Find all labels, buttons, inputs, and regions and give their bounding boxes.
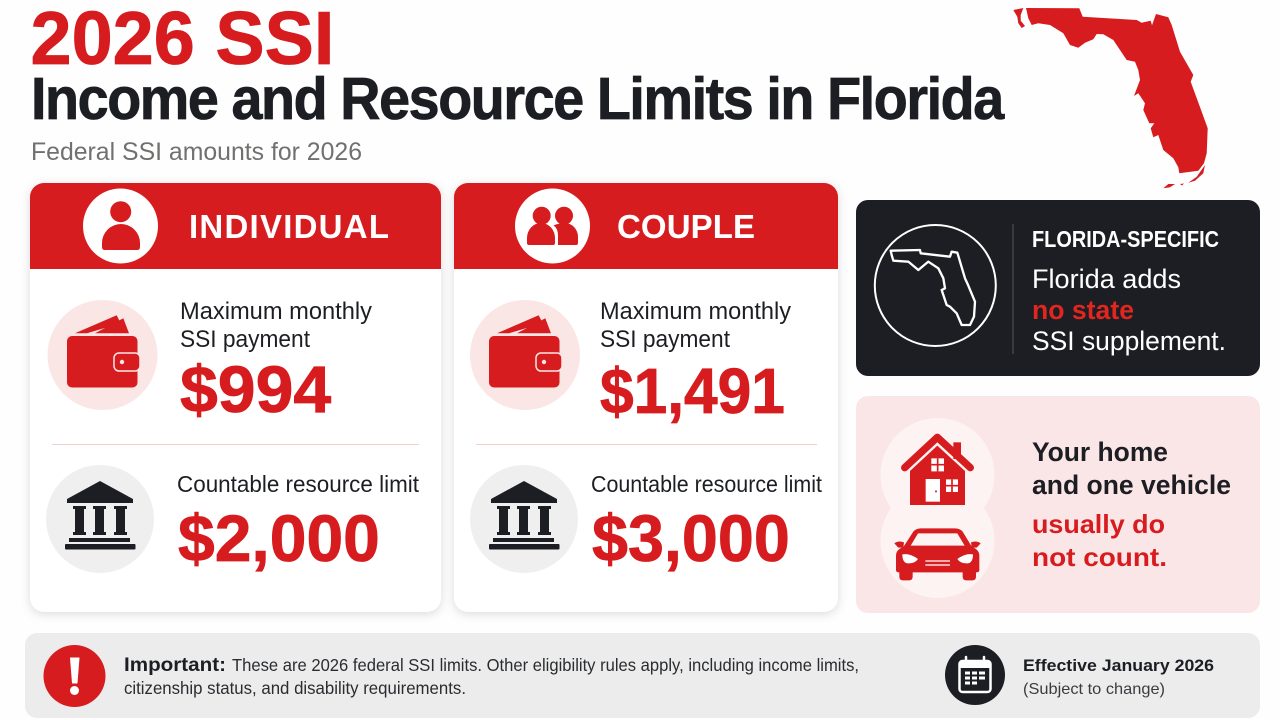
home text: and one vehicle — [1032, 470, 1231, 500]
icon: Florida outline — [875, 225, 996, 346]
icon: car — [894, 528, 981, 580]
payment amount: $1,491 — [600, 356, 785, 427]
home text: usually do — [1032, 509, 1165, 539]
home text: Your home — [1032, 437, 1168, 467]
resource label: Countable resource limit — [591, 471, 823, 497]
individual header — [30, 183, 441, 269]
panel: individual: SSI payment — [180, 326, 310, 353]
panel: individual — [30, 183, 441, 612]
Florida-specific text: FLORIDA-SPECIFIC — [1032, 226, 1219, 252]
couple header: COUPLE — [617, 208, 755, 245]
note text: citizenship status, and disability requirements. — [124, 678, 466, 698]
Florida-specific text: SSI supplement. — [1032, 326, 1226, 356]
panel: Florida-specific — [856, 200, 1260, 376]
Florida-specific text: no state — [1032, 295, 1134, 325]
map: Florida — [1013, 8, 1208, 188]
couple header — [454, 183, 838, 269]
icon: wallet — [470, 300, 580, 410]
panel: couple — [454, 183, 838, 612]
title: Income and Resource Limits in Florida — [31, 67, 1005, 132]
home text — [1032, 437, 1231, 572]
Florida-specific text — [1032, 226, 1226, 356]
note text: Important: — [124, 655, 226, 676]
home text: not count. — [1032, 542, 1167, 572]
icon: bank — [470, 465, 578, 573]
icon: wallet — [48, 300, 158, 410]
effective date: Effective January 2026 — [1023, 656, 1214, 675]
payment label: Maximum monthly — [600, 298, 791, 325]
panel: home and vehicle — [856, 396, 1260, 613]
effective date: (Subject to change) — [1023, 681, 1165, 698]
icon: bank — [46, 465, 154, 573]
payment amount: $994 — [180, 353, 331, 427]
note text — [124, 655, 859, 698]
payment label: Maximum monthly — [180, 298, 372, 325]
subtitle: Federal SSI amounts for 2026 — [31, 138, 362, 166]
icon: calendar — [945, 645, 1005, 705]
resource label: Countable resource limit — [177, 471, 420, 497]
icon: house — [905, 437, 970, 505]
resource amount: $2,000 — [178, 501, 380, 575]
Florida-specific text: Florida adds — [1032, 264, 1181, 294]
note text: These are 2026 federal SSI limits. Other eligibility rules apply, including income limits, — [232, 655, 859, 675]
resource amount: $3,000 — [592, 501, 790, 575]
panel: important note — [25, 633, 1260, 718]
icon: alert — [44, 645, 106, 707]
effective date — [1023, 656, 1214, 698]
title — [30, 0, 1005, 132]
individual header: INDIVIDUAL — [189, 208, 389, 245]
panel: couple: SSI payment — [600, 326, 730, 353]
